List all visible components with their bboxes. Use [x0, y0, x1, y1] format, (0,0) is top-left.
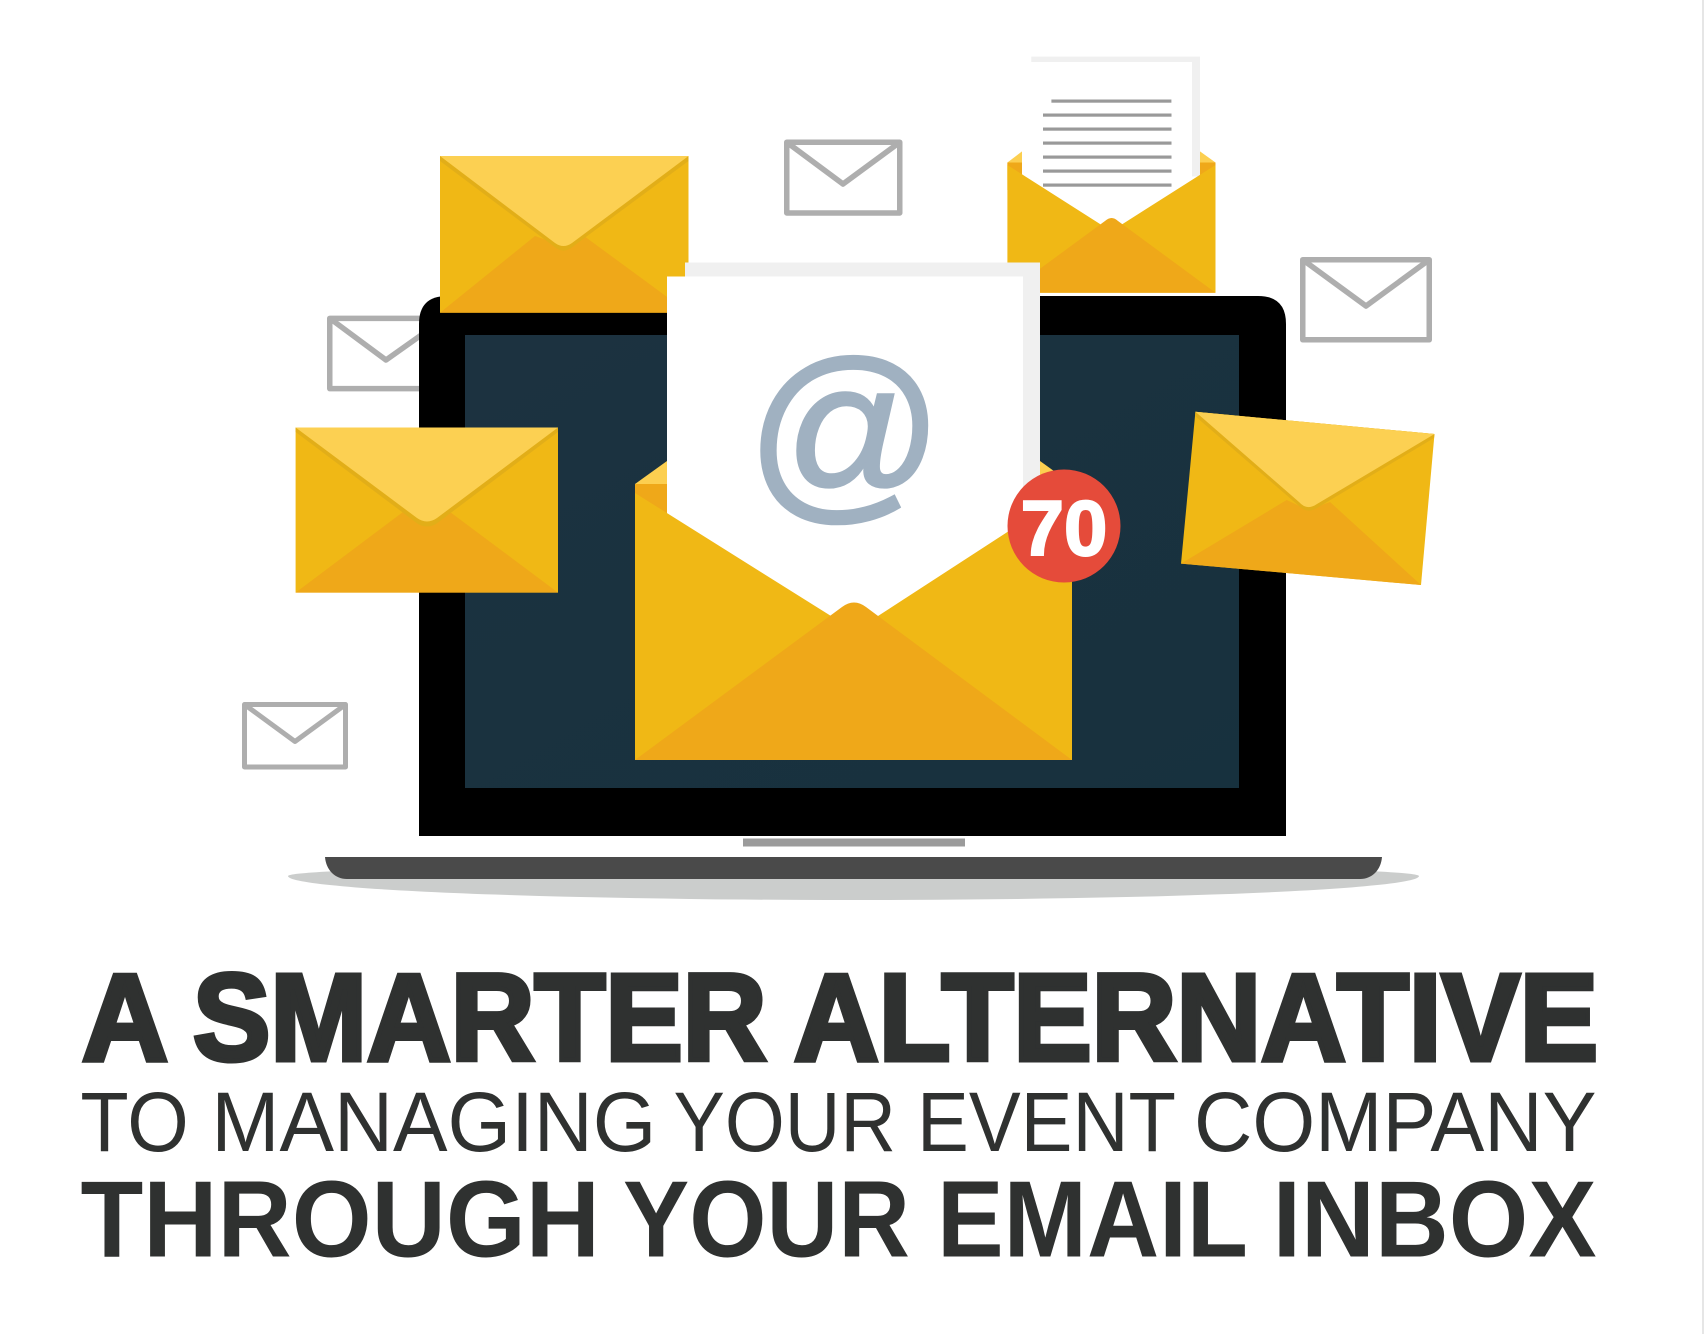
letter text lines — [1043, 100, 1172, 187]
icon: outline envelope left, behind laptop — [330, 318, 445, 389]
letter sheet front — [667, 276, 1023, 640]
laptop base — [325, 857, 1382, 879]
letter sheet back — [685, 262, 1040, 532]
envelope back flap — [635, 330, 1072, 484]
title line 2: COMPANY — [1194, 1075, 1596, 1169]
title — [80, 950, 1598, 1281]
title line 3: INBOX — [1273, 1159, 1597, 1281]
notification badge 70 — [1008, 470, 1120, 582]
icon: tilted yellow envelope right — [1181, 412, 1434, 585]
icon: outline envelope right — [1303, 260, 1429, 340]
envelope sides — [635, 490, 1072, 760]
title line 3: EMAIL — [937, 1159, 1248, 1281]
title line 1: ALTERNATIVE — [794, 950, 1598, 1087]
title line 3: YOUR — [623, 1159, 910, 1281]
laptop lid — [419, 296, 1286, 836]
laptop hinge — [743, 838, 965, 846]
title line 1 — [82, 950, 1598, 1087]
icon: yellow envelope top left — [440, 156, 688, 313]
title line 2: TO — [80, 1075, 189, 1169]
icon: outline envelope top centre — [787, 142, 900, 213]
notification badge 70: 70 — [1021, 484, 1107, 572]
title line 2 — [80, 1075, 1596, 1169]
laptop — [288, 296, 1419, 900]
laptop shadow — [288, 864, 1419, 900]
title line 1: SMARTER — [193, 950, 766, 1087]
title line 3 — [80, 1159, 1597, 1281]
title line 2: EVENT — [917, 1075, 1176, 1169]
at symbol: @ — [747, 322, 943, 539]
letter sheet — [1031, 57, 1200, 192]
envelope front flap — [635, 602, 1072, 760]
icon: open envelope with letter, top right — [1007, 57, 1216, 293]
envelope sides — [1007, 165, 1216, 293]
title line 3: THROUGH — [80, 1159, 600, 1281]
envelope front flap — [1007, 218, 1216, 293]
icon: large open envelope with @ letter — [635, 262, 1072, 760]
laptop screen — [465, 335, 1239, 788]
envelope back flap — [1007, 151, 1216, 180]
icon: outline envelope bottom left — [244, 704, 346, 767]
title line 2: YOUR — [674, 1075, 896, 1169]
title line 1: A — [82, 950, 168, 1087]
icon: yellow envelope left — [296, 428, 558, 593]
title line 2: MANAGING — [211, 1075, 656, 1169]
